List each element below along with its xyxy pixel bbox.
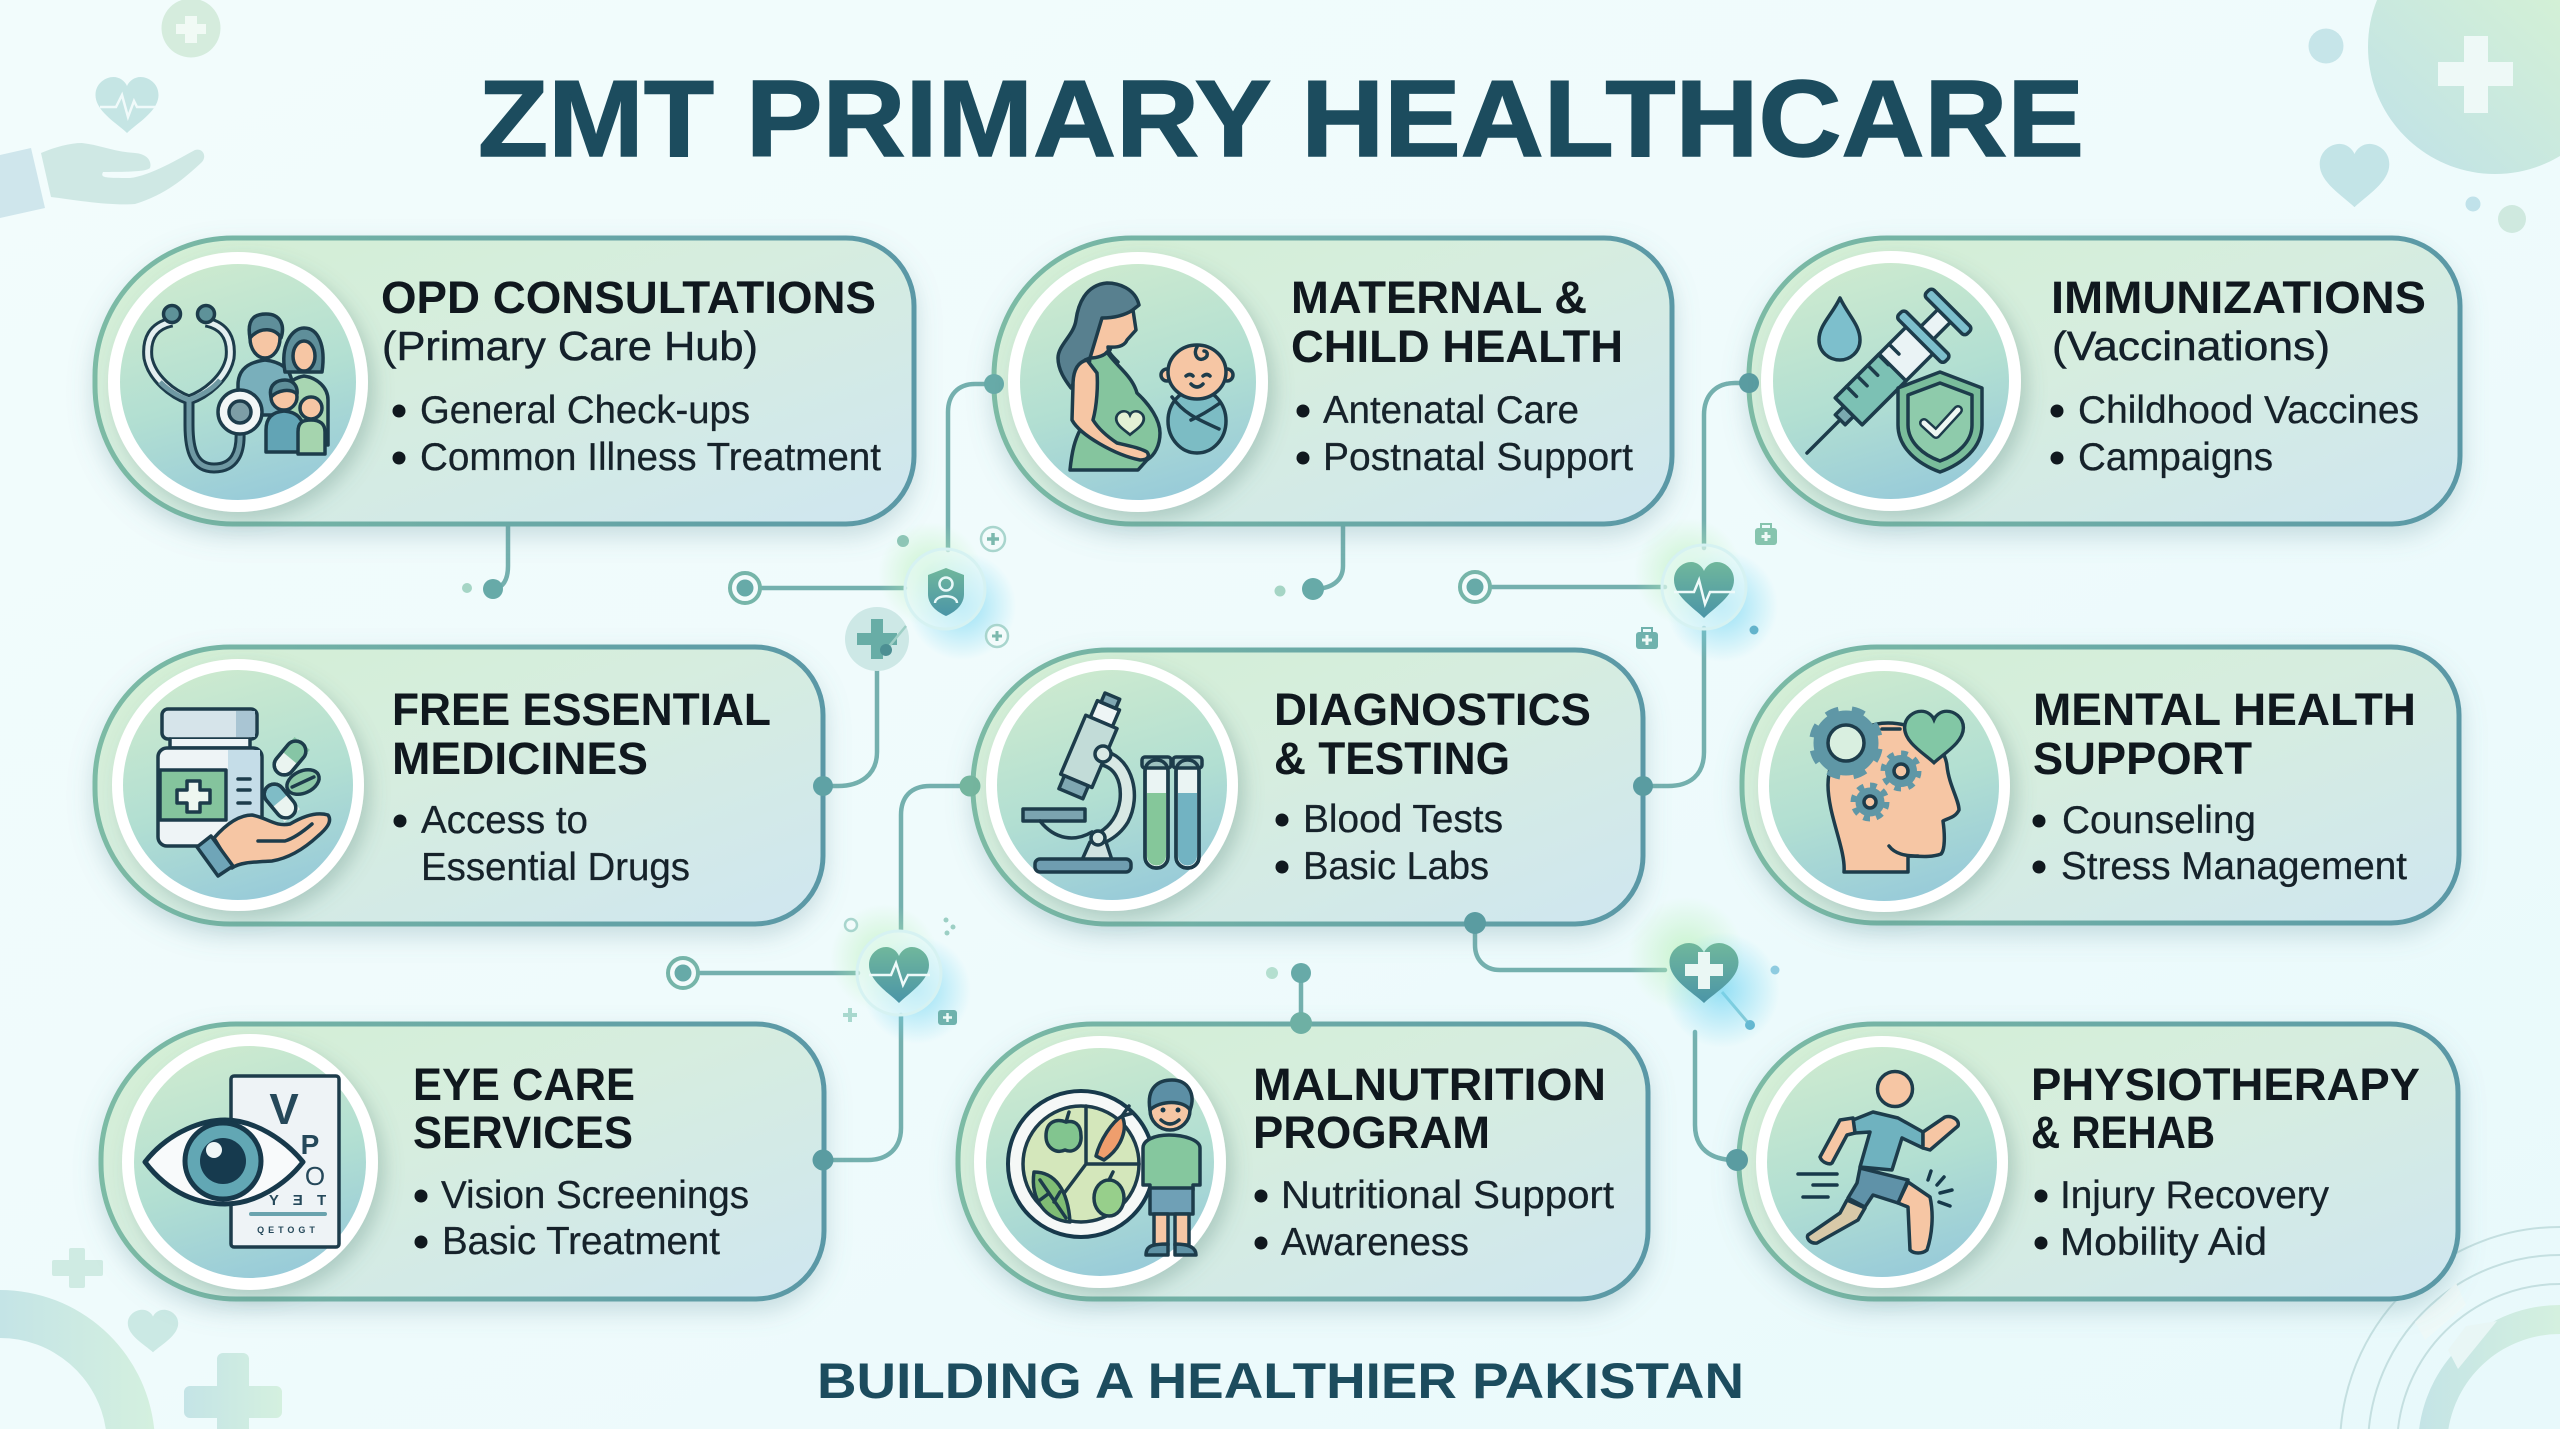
bullet list: Vision Screenings xyxy=(441,1174,749,1217)
panel: physiotherapy and rehab xyxy=(1726,1024,2458,1299)
title: ZMT PRIMARY HEALTHCARE xyxy=(478,58,2084,180)
bullet list: Awareness xyxy=(1281,1221,1469,1264)
heading: MATERNAL & xyxy=(1291,272,1587,323)
connector: maternal to lower node xyxy=(1274,524,1343,600)
heading: PHYSIOTHERAPY xyxy=(2031,1059,2420,1110)
bullet list: Postnatal Support xyxy=(1323,436,1633,479)
panel: malnutrition program xyxy=(958,1012,1648,1299)
icon: head with gears and heart xyxy=(1810,707,1963,872)
bullet list xyxy=(1254,1174,1614,1264)
icon: eye and eye chart xyxy=(145,1076,339,1247)
bullet list: Mobility Aid xyxy=(2060,1221,2267,1264)
heading: IMMUNIZATIONS xyxy=(2051,272,2426,323)
icon: stethoscope and family xyxy=(148,306,328,468)
heading line two: SERVICES xyxy=(413,1107,633,1158)
icon: eye and eye chart: P xyxy=(301,1129,319,1160)
decoration: bottom right concentric arcs xyxy=(2341,1227,2560,1429)
connector hub 2: heart pulse xyxy=(1460,383,1778,786)
connector hub 4: heart with plus xyxy=(1475,897,1780,1160)
panel: maternal and child health xyxy=(984,238,1672,524)
connector hub 1: shield xyxy=(730,384,1016,660)
bullet list: Blood Tests xyxy=(1303,798,1503,841)
bullet list xyxy=(2032,799,2407,888)
bullet list xyxy=(2050,389,2419,479)
icon: medicine bottle, pills and hand xyxy=(158,709,330,876)
subheading: (Vaccinations) xyxy=(2052,323,2330,369)
bullet list xyxy=(394,799,690,889)
bullet list xyxy=(1276,798,1503,888)
decoration: bottom left ring, plus and heart xyxy=(0,1248,282,1429)
panel: immunizations xyxy=(1739,238,2460,524)
panel: free essential medicines xyxy=(95,647,833,924)
icon: eye and eye chart: V xyxy=(269,1085,299,1134)
bullet list xyxy=(414,1174,749,1263)
heading line two: MEDICINES xyxy=(392,733,648,784)
heading line two: & REHAB xyxy=(2031,1107,2215,1158)
bullet list: Essential Drugs xyxy=(421,846,690,889)
heading: DIAGNOSTICS xyxy=(1274,684,1591,735)
icon: mother and baby xyxy=(1058,283,1233,470)
heading: MALNUTRITION xyxy=(1253,1059,1606,1110)
icon: eye and eye chart: Y Ǝ T xyxy=(269,1192,331,1209)
panel: diagnostics and testing xyxy=(960,650,1653,934)
decoration: top left hand, heart and plus xyxy=(0,0,220,218)
bullet list xyxy=(2034,1174,2329,1264)
icon: syringe, drop and shield xyxy=(1784,285,1982,476)
heading: OPD CONSULTATIONS xyxy=(381,272,876,323)
bullet list: General Check-ups xyxy=(420,389,750,432)
bullet list: Common Illness Treatment xyxy=(420,436,881,479)
icon: microscope and test tubes xyxy=(1023,689,1202,872)
bullet list: Access to xyxy=(421,799,588,842)
bullet list: Nutritional Support xyxy=(1281,1174,1614,1217)
bullet list: Stress Management xyxy=(2061,845,2407,888)
subheading: (Primary Care Hub) xyxy=(382,323,758,369)
panel: OPD consultations xyxy=(95,238,914,524)
heading line two: CHILD HEALTH xyxy=(1291,321,1623,372)
bullet list: Childhood Vaccines xyxy=(2078,389,2419,432)
connector hub: plus to free medicines xyxy=(823,607,909,786)
heading line two: SUPPORT xyxy=(2033,733,2252,784)
bullet list xyxy=(1296,389,1633,479)
icon: food plate and child xyxy=(1008,1080,1200,1255)
bullet list: Campaigns xyxy=(2078,436,2273,479)
decoration: top right circle, heart and dots xyxy=(2308,0,2560,233)
heading: EYE CARE xyxy=(413,1059,635,1110)
heading line two: & TESTING xyxy=(1274,733,1510,784)
bullet list xyxy=(392,389,881,479)
bullet list: Basic Treatment xyxy=(442,1220,720,1263)
bullet list: Counseling xyxy=(2062,799,2256,842)
panel: mental health support xyxy=(1742,647,2459,923)
bullet list: Antenatal Care xyxy=(1323,389,1579,432)
heading: MENTAL HEALTH xyxy=(2033,684,2416,735)
icon: eye and eye chart: QETOGT xyxy=(257,1225,319,1235)
connector: OPD to lower node xyxy=(462,524,508,599)
panel: eye care services xyxy=(101,1024,834,1299)
connector hub 3: heart pulse xyxy=(668,786,971,1160)
icon: eye and eye chart: O xyxy=(305,1161,325,1191)
bullet list: Injury Recovery xyxy=(2060,1174,2329,1217)
icon: running figure xyxy=(1798,1072,1958,1253)
heading: FREE ESSENTIAL xyxy=(392,684,771,735)
footer tagline: BUILDING A HEALTHIER PAKISTAN xyxy=(817,1353,1744,1409)
heading line two: PROGRAM xyxy=(1253,1107,1490,1158)
connector: malnutrition top node xyxy=(1266,963,1311,1023)
bullet list: Basic Labs xyxy=(1303,845,1489,888)
